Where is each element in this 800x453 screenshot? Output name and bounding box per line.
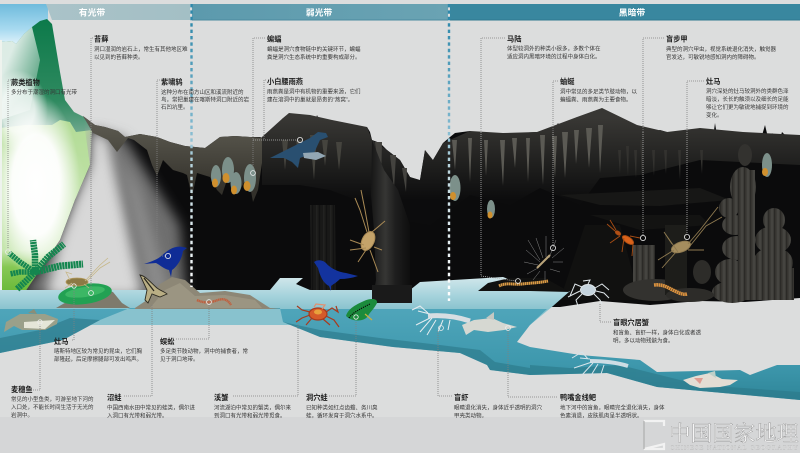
header band: 黑暗带 [450,4,800,20]
watermark logo: 中国国家地理 [669,417,799,448]
icon: pale cave fish [462,312,517,335]
zone dividers [192,4,449,301]
rock ceiling: entrance stalactites [83,116,270,202]
rock ceiling: mid and deep zones [262,108,800,225]
bottom tone band [0,417,800,453]
callout: 麦穗鱼: 入口处，不能长时间生活于无光的 [11,403,94,411]
callout: 灶马 (黑暗带): 暗淡，长长的触须以及细长的足能 [706,95,789,103]
icon: red river crab [296,304,339,327]
callout: 马陆: 适应洞内黑暗环境的过程中身体白化。 [507,52,601,60]
callout: 紫啸鸫 [157,78,250,259]
callout: 紫啸鸫: 紫啸鸫 [161,78,183,86]
icon: stone fish [4,309,58,332]
callout: 灶马 (有光带) [54,284,143,363]
icon: millipede on island [499,281,548,286]
icon: hanging bats [211,153,772,218]
icon: lower blind shrimp [572,352,628,377]
callout: 溪蟹: 河流湖泊中常见的蟹类，偶尔来 [214,404,292,412]
callout: 洞穴蛙: 洞穴蛙 [306,393,328,402]
callout: 灶马 (黑暗带) [684,77,789,240]
header band: 黑暗带: 黑暗带 [619,6,645,18]
callout: 小白腰雨燕 [253,77,361,143]
watermark logo: CHINESE NATIONAL GEOGRAPHY [670,444,798,452]
callout: 盲步甲: 典型的洞穴甲虫，视觉系统退化消失，触觉器 [666,45,777,53]
callout: 盲眼穴居蟹 [600,304,702,344]
shallow pale water [0,277,570,325]
callout: 盲虾: 盲虾 [454,393,468,402]
mossy rock [56,280,130,308]
icon: cave cricket on moss [65,258,110,288]
callout: 洞穴蛙: 蛙，循环发育于洞穴水系中。 [306,412,378,420]
icon: deep zone cricket [658,207,722,268]
icon: blue bird on the rock [314,260,358,291]
icon: blind cave crab [568,280,609,306]
callout: 沼蛙: 中国西南水田中常见的蛙类，偶尔进 [107,404,196,412]
callout: 鸭嘴金线鲃: 鸭嘴金线鲃 [560,393,596,402]
pillar base in the water [372,285,412,303]
icon: house centipede [524,236,564,280]
callout: 洞穴蛙: 已知种类如红点齿蟾、务川臭 [306,404,378,412]
callout: 蕨类植物 [6,78,78,254]
callout: 麦穗鱼 [11,320,94,419]
callout: 蚰蜒 [550,77,638,251]
callout: 盲虾 [438,326,543,420]
icon: purple whistling thrush [144,247,187,277]
callout: 沼蛙: 沼蛙 [107,393,121,402]
stalactites [282,125,703,192]
callout: 苔藓: 洞口湿润的岩石上，常生有其他地区难 [94,45,188,53]
header band: 有光带: 有光带 [79,6,105,18]
icon: blind beetle [607,220,640,256]
callout: 灶马 (黑暗带): 变化。 [706,111,723,119]
callout: 盲步甲: 官发达，可敏锐地感知洞内的障碍物。 [666,53,760,61]
callout: 紫啸鸫: 石凹坑里。 [161,103,189,111]
callout: 盲步甲 [640,34,777,241]
icon: blind shrimp [412,306,470,335]
callout: 鸭嘴金线鲃: 色素消退，皮肤肌肉呈半透明状。 [560,412,643,420]
callout: 洞穴蛙 [306,315,378,420]
callout: 马陆: 体型较洞外的种类小很多，多数个体在 [507,44,601,52]
callout: 灶马 (黑暗带): 灶马 [706,77,720,86]
callout: 蚰蜒: 洞中常见的多足类节肢动物，以 [560,88,638,96]
rock island under the millipede [478,278,570,292]
entrance: sky, hillside and sunlit vegetation [0,4,92,292]
header band: 有光带 [46,4,190,20]
icon: swift [270,132,328,168]
callout: 沼蛙 [107,305,196,420]
callout: 盲虾: 眼睛退化消失，身体近乎透明的洞穴 [454,404,543,412]
callout: 麦穗鱼: 岩洞中。 [11,411,33,419]
header band: 弱光带 [192,4,448,20]
callout: 盲虾: 甲壳类动物。 [454,412,487,420]
callout: 灶马 (有光带): 喀斯特地区较为常见的昆虫，它们胸 [54,347,143,355]
river bank rock [135,277,280,309]
cave interior silhouette [25,108,800,307]
callout: 溪蟹: 到洞口有光带和弱光带觅食。 [214,412,286,420]
callout: 鸭嘴金线鲃: 地下河中的盲鱼，眼睛完全退化消失，身体 [560,404,665,412]
callout: 灶马 (有光带): 部隆起，后足摩擦腿部可发出鸣声。 [54,355,142,363]
underground river [0,308,800,400]
stalagmite cluster [623,144,794,303]
callout: 蝙蝠: 蝙蝠 [267,34,281,44]
callout: 蝙蝠: 蝙蝠是洞穴食物链中的关键环节，蝙蝠 [267,45,361,53]
callout: 蜈蚣 [160,300,249,363]
callout: 盲步甲: 盲步甲 [666,34,688,44]
callout: 苔藓: 以见到的苔藓种类。 [94,53,144,61]
callout: 苔藓: 苔藓 [94,34,108,44]
callout: 紫啸鸫: 这种分布在南方山区和溪流附近的 [161,88,244,96]
callout: 蝙蝠: 粪是洞穴生态系统中的重要构成部分。 [267,53,361,61]
callout: 蜈蚣: 多足类节肢动物，洞中的捕食者，常 [160,347,249,355]
callout: 小白腰雨燕: 小白腰雨燕 [267,77,303,86]
callout: 小白腰雨燕: 建在溶洞中的巢就是昂贵的“燕窝”。 [267,96,353,104]
callout: 灶马 (黑暗带): 洞穴深处的灶马较洞外的类群色泽 [706,87,789,95]
callout: 蚰蜒: 蝙蝠粪、雨燕粪为主要食物。 [560,96,632,104]
secondary rock column [308,205,340,293]
icon: green cave frog [346,299,377,320]
callout: 蕨类植物: 蕨类植物 [11,78,40,87]
callout: 马陆 [481,34,601,283]
callout: 盲眼穴居蟹: 和盲鱼、盲虾一样，身体白化或者透 [613,328,702,336]
callout: 鸭嘴金线鲃 [506,326,665,420]
header band: 弱光带: 弱光带 [306,6,332,18]
callout: 灶马 (有光带): 灶马 [54,337,68,346]
callout: 马陆: 马陆 [507,34,521,44]
callout: 蜈蚣: 见于洞口地带。 [160,355,199,363]
callout: 蜈蚣: 蜈蚣 [160,337,175,346]
callout: 盲眼穴居蟹: 明，多以动物残骸为食。 [613,336,674,344]
icon: cave cricket on pillar [350,190,385,272]
callout: 蚰蜒: 蚰蜒 [560,77,575,86]
deep zone ceiling ledges [560,188,730,300]
callout: 盲眼穴居蟹: 盲眼穴居蟹 [613,318,649,327]
callout: 溪蟹 [214,324,298,420]
daylight falling into the cave [20,128,186,296]
icon: fern [9,240,83,289]
icon: centipede [197,299,231,305]
callout: 小白腰雨燕: 雨燕粪是洞中有机物的重要来源，它们 [267,88,361,96]
bright sunlit edge over the cave mouth [19,173,82,281]
callout: 苔藓 [89,34,188,295]
icon: golden-line barbel [683,371,738,388]
callout: 蝙蝠 [251,34,361,175]
icon: orange millipede by stalagmites [654,285,687,294]
callout: 麦穗鱼: 常见的小型鱼类，可游至地下河的 [11,395,94,403]
callout: 沼蛙: 入洞口有光带和弱光带。 [107,412,168,420]
main limestone pillar [371,140,412,303]
callout: 蕨类植物: 多分布于潮湿的洞口有光带 [11,88,78,96]
callout: 麦穗鱼: 麦穗鱼 [11,385,33,394]
river bed shading [0,318,800,400]
callout: 紫啸鸫: 鸟，常把巢建在喀斯特洞口附近的岩 [161,96,250,104]
callout: 溪蟹: 溪蟹 [214,393,228,402]
icon: paddy frog [140,275,167,303]
callout: 灶马 (黑暗带): 够让它们更为敏锐地捕捉到环境的 [706,103,789,111]
